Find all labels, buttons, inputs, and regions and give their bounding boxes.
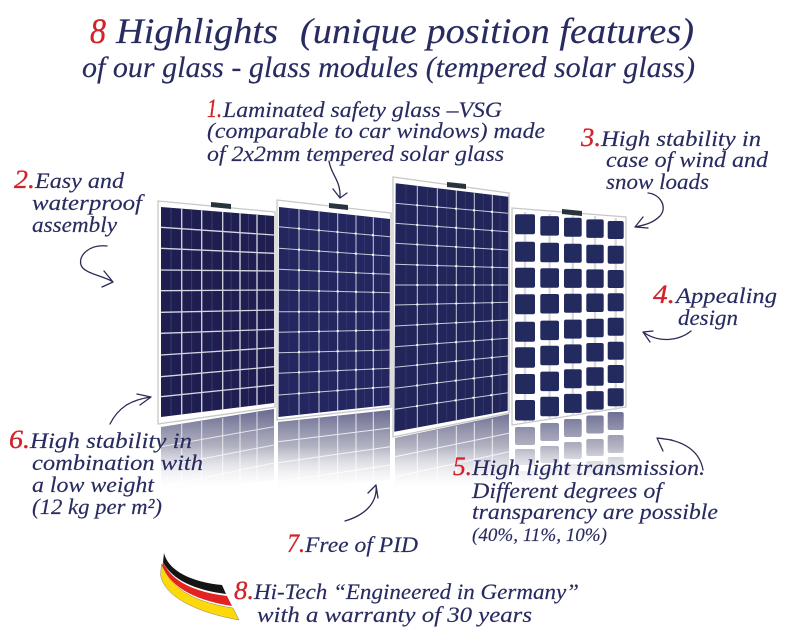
- cells: [161, 207, 274, 417]
- reflection of module 2: [278, 410, 390, 490]
- callout 3: case of wind and: [606, 147, 769, 172]
- cell stripes: [406, 185, 500, 429]
- grid nodes: [278, 227, 390, 395]
- title: (unique position features): [300, 11, 694, 51]
- grid lines: [278, 209, 390, 415]
- callout 6: a low weight: [32, 472, 155, 497]
- cells: [278, 207, 390, 417]
- callout 5: transparency are possible: [472, 499, 718, 524]
- callout 1: of 2x2mm tempered solar glass: [207, 141, 504, 166]
- arrow 5: [657, 438, 703, 470]
- callout 7: 7.: [287, 529, 305, 558]
- callout 6: [9, 425, 203, 519]
- callout 1: (comparable to car windows) made: [207, 118, 545, 143]
- callout 5: High light transmission.: [471, 455, 705, 480]
- callout 5: 5.: [453, 452, 472, 481]
- panel: solar module 2: [277, 200, 391, 490]
- subtitle: of our glass - glass modules (tempered solar glass): [82, 51, 695, 84]
- callout 7: [287, 529, 418, 558]
- junction box: [329, 203, 348, 210]
- callout 6: 6.: [9, 425, 30, 454]
- callout 2: 2.: [14, 165, 35, 194]
- callout 3: 3.: [580, 123, 601, 152]
- callout 7: Free of PID: [304, 532, 418, 557]
- callout 1: [207, 94, 545, 166]
- panel: solar module 1: [158, 201, 275, 495]
- reflection of module 1: [161, 409, 274, 495]
- arrow 6: [110, 394, 151, 424]
- reflection of module 3: [395, 414, 509, 495]
- callout 3: [580, 123, 769, 194]
- reflection of module 4: [515, 412, 624, 487]
- title: 8: [90, 11, 106, 51]
- junction box: [562, 209, 582, 216]
- cell stripes: [289, 208, 382, 415]
- callout 4: design: [678, 305, 738, 330]
- callout 3: snow loads: [606, 169, 709, 194]
- callout 3: High stability in: [600, 126, 761, 151]
- cells: [515, 214, 624, 420]
- arrow 2: [81, 246, 113, 287]
- callout 2: Easy and: [34, 168, 125, 193]
- arrow 1: [329, 161, 347, 198]
- callout 6: combination with: [32, 450, 203, 475]
- frame: [393, 177, 509, 437]
- panel: solar module 3: [393, 177, 509, 495]
- junction box: [447, 182, 466, 189]
- callout 2: [14, 165, 145, 237]
- callout 4: Appealing: [674, 283, 777, 308]
- callout 8: with a warranty of 30 years: [257, 602, 532, 627]
- callout 2: assembly: [32, 212, 117, 237]
- callout 4: [653, 280, 777, 330]
- grid lines: [395, 186, 508, 428]
- panel: solar module 4 semi-transparent: [512, 208, 626, 487]
- cells: [394, 183, 508, 432]
- frame: [158, 201, 275, 424]
- callout 4: 4.: [653, 280, 675, 309]
- cell stripes: [171, 208, 266, 416]
- callout 5: Different degrees of: [471, 478, 665, 503]
- frame: [277, 200, 391, 420]
- callout 6: High stability in: [29, 428, 192, 453]
- callout 1: Laminated safety glass –VSG: [222, 97, 502, 122]
- grid lines: [161, 209, 274, 414]
- arrow 3: [635, 193, 663, 228]
- callout 5: [453, 452, 718, 546]
- callout 8: Hi-Tech “Engineered in Germany”: [253, 579, 579, 604]
- callout 2: waterproof: [32, 190, 145, 215]
- junction box: [211, 202, 231, 209]
- callout 8: 8.: [234, 576, 254, 605]
- icon: German flag swoosh: [160, 553, 239, 620]
- arrow 4: [643, 331, 691, 342]
- ribbons: [525, 212, 616, 423]
- callout 8: [234, 576, 579, 627]
- callout 5: (40%, 11%, 10%): [472, 525, 607, 546]
- frame: [512, 208, 626, 425]
- grid nodes: [395, 203, 508, 409]
- title: Highlights: [115, 11, 278, 51]
- title: [90, 11, 694, 51]
- callout 6: (12 kg per m²): [32, 494, 162, 519]
- arrow 7: [345, 485, 378, 521]
- callout 1: 1.: [207, 94, 222, 123]
